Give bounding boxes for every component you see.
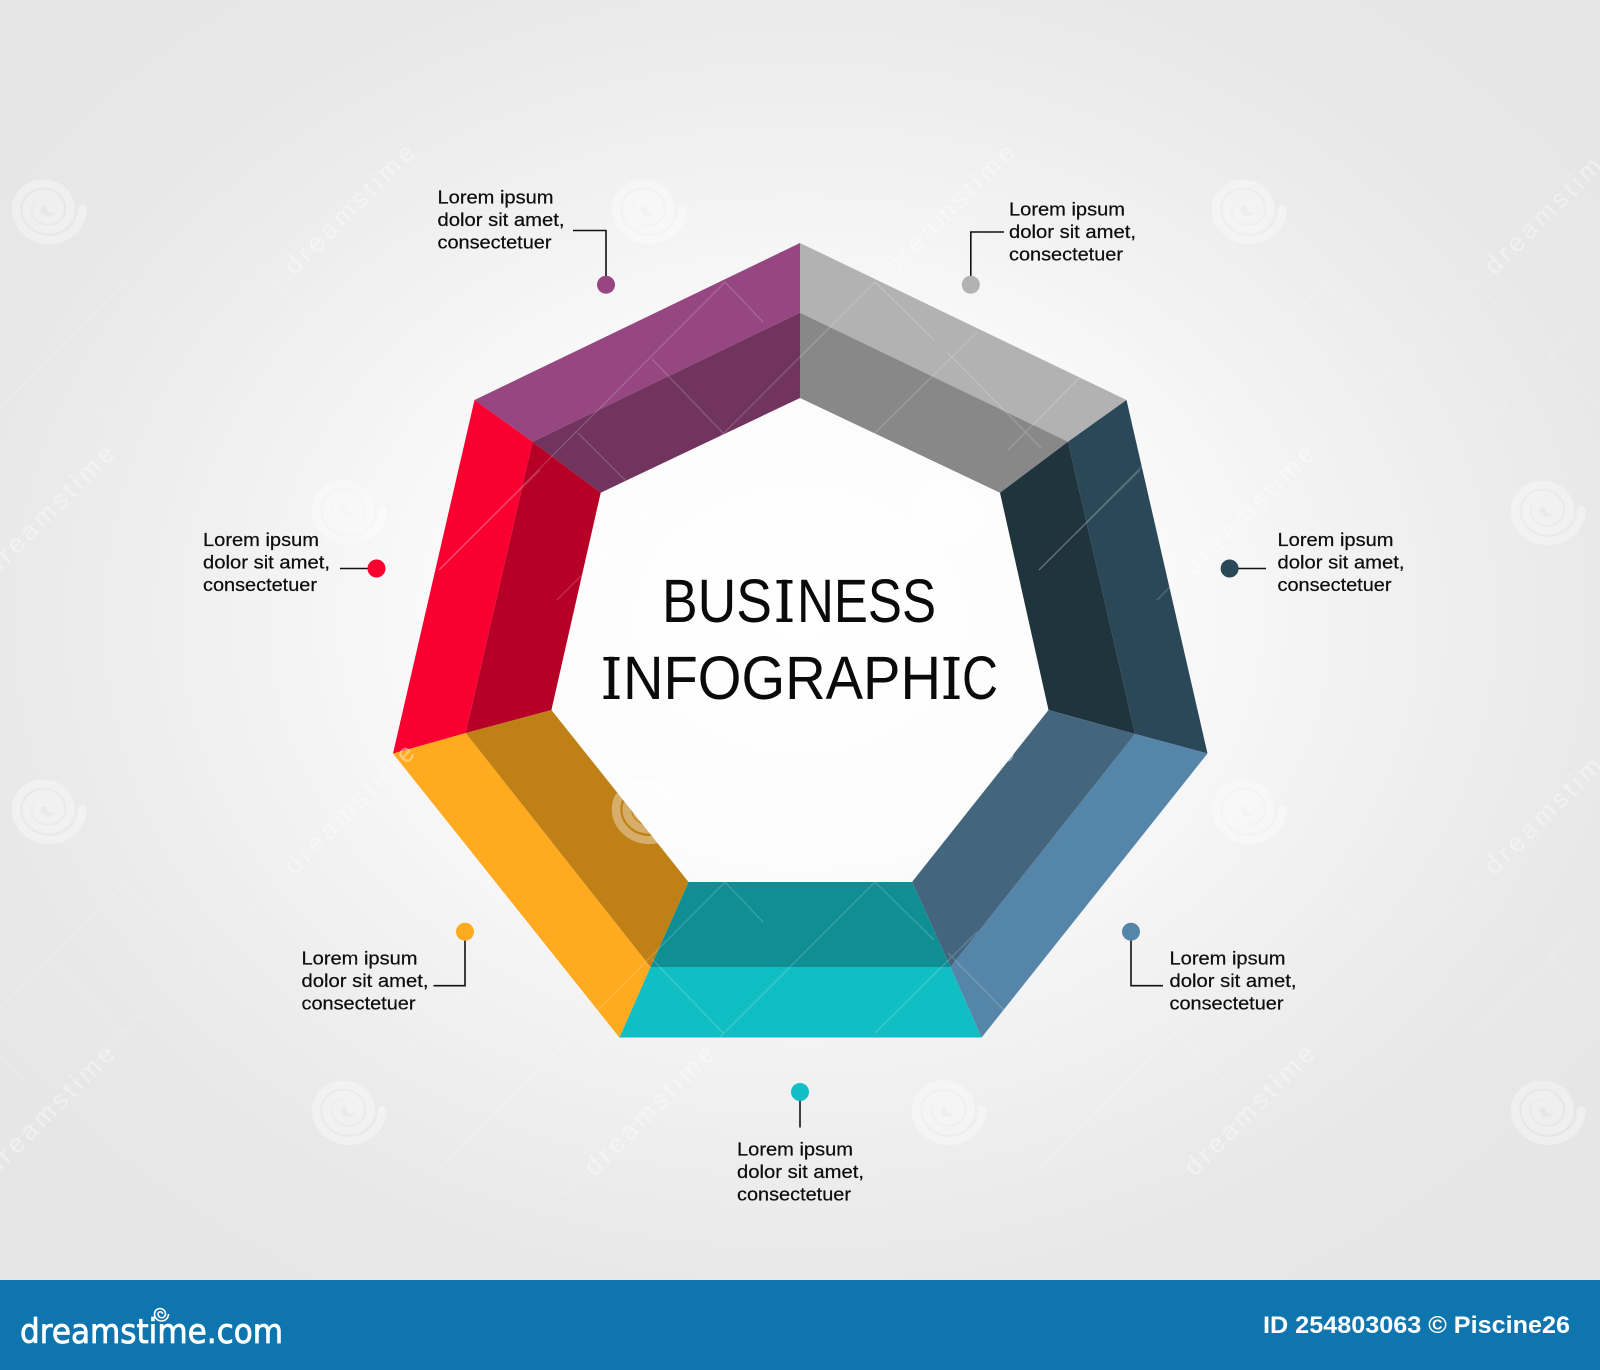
callout: steel blue: consectetuer xyxy=(1170,992,1284,1014)
callout: orange xyxy=(302,923,474,1014)
callout: red: Lorem ipsum xyxy=(203,529,319,550)
watermark overlay: dreamstime xyxy=(878,138,1020,280)
callout: steel blue: Lorem ipsum xyxy=(1170,948,1286,968)
center title: BUS xyxy=(662,567,772,635)
callout: purple: dolor sit amet, xyxy=(438,209,564,230)
footer banner xyxy=(0,1280,1600,1370)
callout: navy xyxy=(1221,529,1404,595)
center title: I xyxy=(776,567,793,635)
callout: steel blue xyxy=(1122,923,1296,1014)
callout: teal xyxy=(737,1083,864,1204)
segment: orange xyxy=(393,710,688,1038)
callout: purple xyxy=(438,186,615,294)
callout: navy: Lorem ipsum xyxy=(1278,529,1394,550)
segment: steel blue xyxy=(912,710,1208,1038)
callout: orange: consectetuer xyxy=(302,992,416,1014)
watermark overlay: dreamstime xyxy=(278,738,420,880)
watermark overlay: dreamstime xyxy=(1178,439,1320,581)
callout: navy: consectetuer xyxy=(1278,574,1392,595)
logo spiral icon xyxy=(154,1308,168,1321)
watermark overlay: dreamstime xyxy=(278,138,420,280)
callout: orange: dolor sit amet, xyxy=(302,970,428,991)
callout: gray: Lorem ipsum xyxy=(1009,198,1125,220)
center title: NESS xyxy=(797,567,936,635)
callout: red xyxy=(203,529,386,595)
callout: purple: Lorem ipsum xyxy=(438,186,554,208)
image id and credit: ID 254803063 © Piscine26 xyxy=(1263,1312,1570,1339)
segment: gray xyxy=(800,243,1126,493)
callout: gray xyxy=(962,198,1136,294)
logo text: dreamstime.com xyxy=(20,1312,283,1352)
callout: gray: consectetuer xyxy=(1009,244,1123,264)
center title: I xyxy=(943,644,960,712)
watermark overlay: dreamstime xyxy=(1178,1039,1320,1181)
callout: steel blue: dolor sit amet, xyxy=(1170,970,1296,991)
center title: I xyxy=(603,644,620,712)
callout: orange: Lorem ipsum xyxy=(302,948,418,968)
watermark overlay: dreamstime xyxy=(578,1039,720,1181)
callout: navy: dolor sit amet, xyxy=(1278,552,1404,572)
watermark overlay xyxy=(0,138,1600,1200)
callout: teal: consectetuer xyxy=(737,1184,851,1204)
segment: navy xyxy=(1000,400,1208,754)
callout: gray: dolor sit amet, xyxy=(1009,221,1136,242)
heptagon ring diagram xyxy=(393,243,1208,1038)
segment: teal xyxy=(619,882,982,1038)
callout: teal: dolor sit amet, xyxy=(737,1161,864,1182)
center title xyxy=(603,567,998,712)
segment: purple xyxy=(474,243,800,493)
callout: teal: Lorem ipsum xyxy=(737,1138,853,1160)
watermark overlay: dreamstime xyxy=(578,439,720,581)
watermark overlay: dreamstime xyxy=(878,738,1020,880)
center title: NFOGRAPH xyxy=(623,644,941,712)
center title: C xyxy=(962,644,998,712)
callout: red: consectetuer xyxy=(203,574,317,595)
callout: red: dolor sit amet, xyxy=(203,552,330,572)
callout: purple: consectetuer xyxy=(438,232,552,252)
segment: red xyxy=(393,400,601,754)
